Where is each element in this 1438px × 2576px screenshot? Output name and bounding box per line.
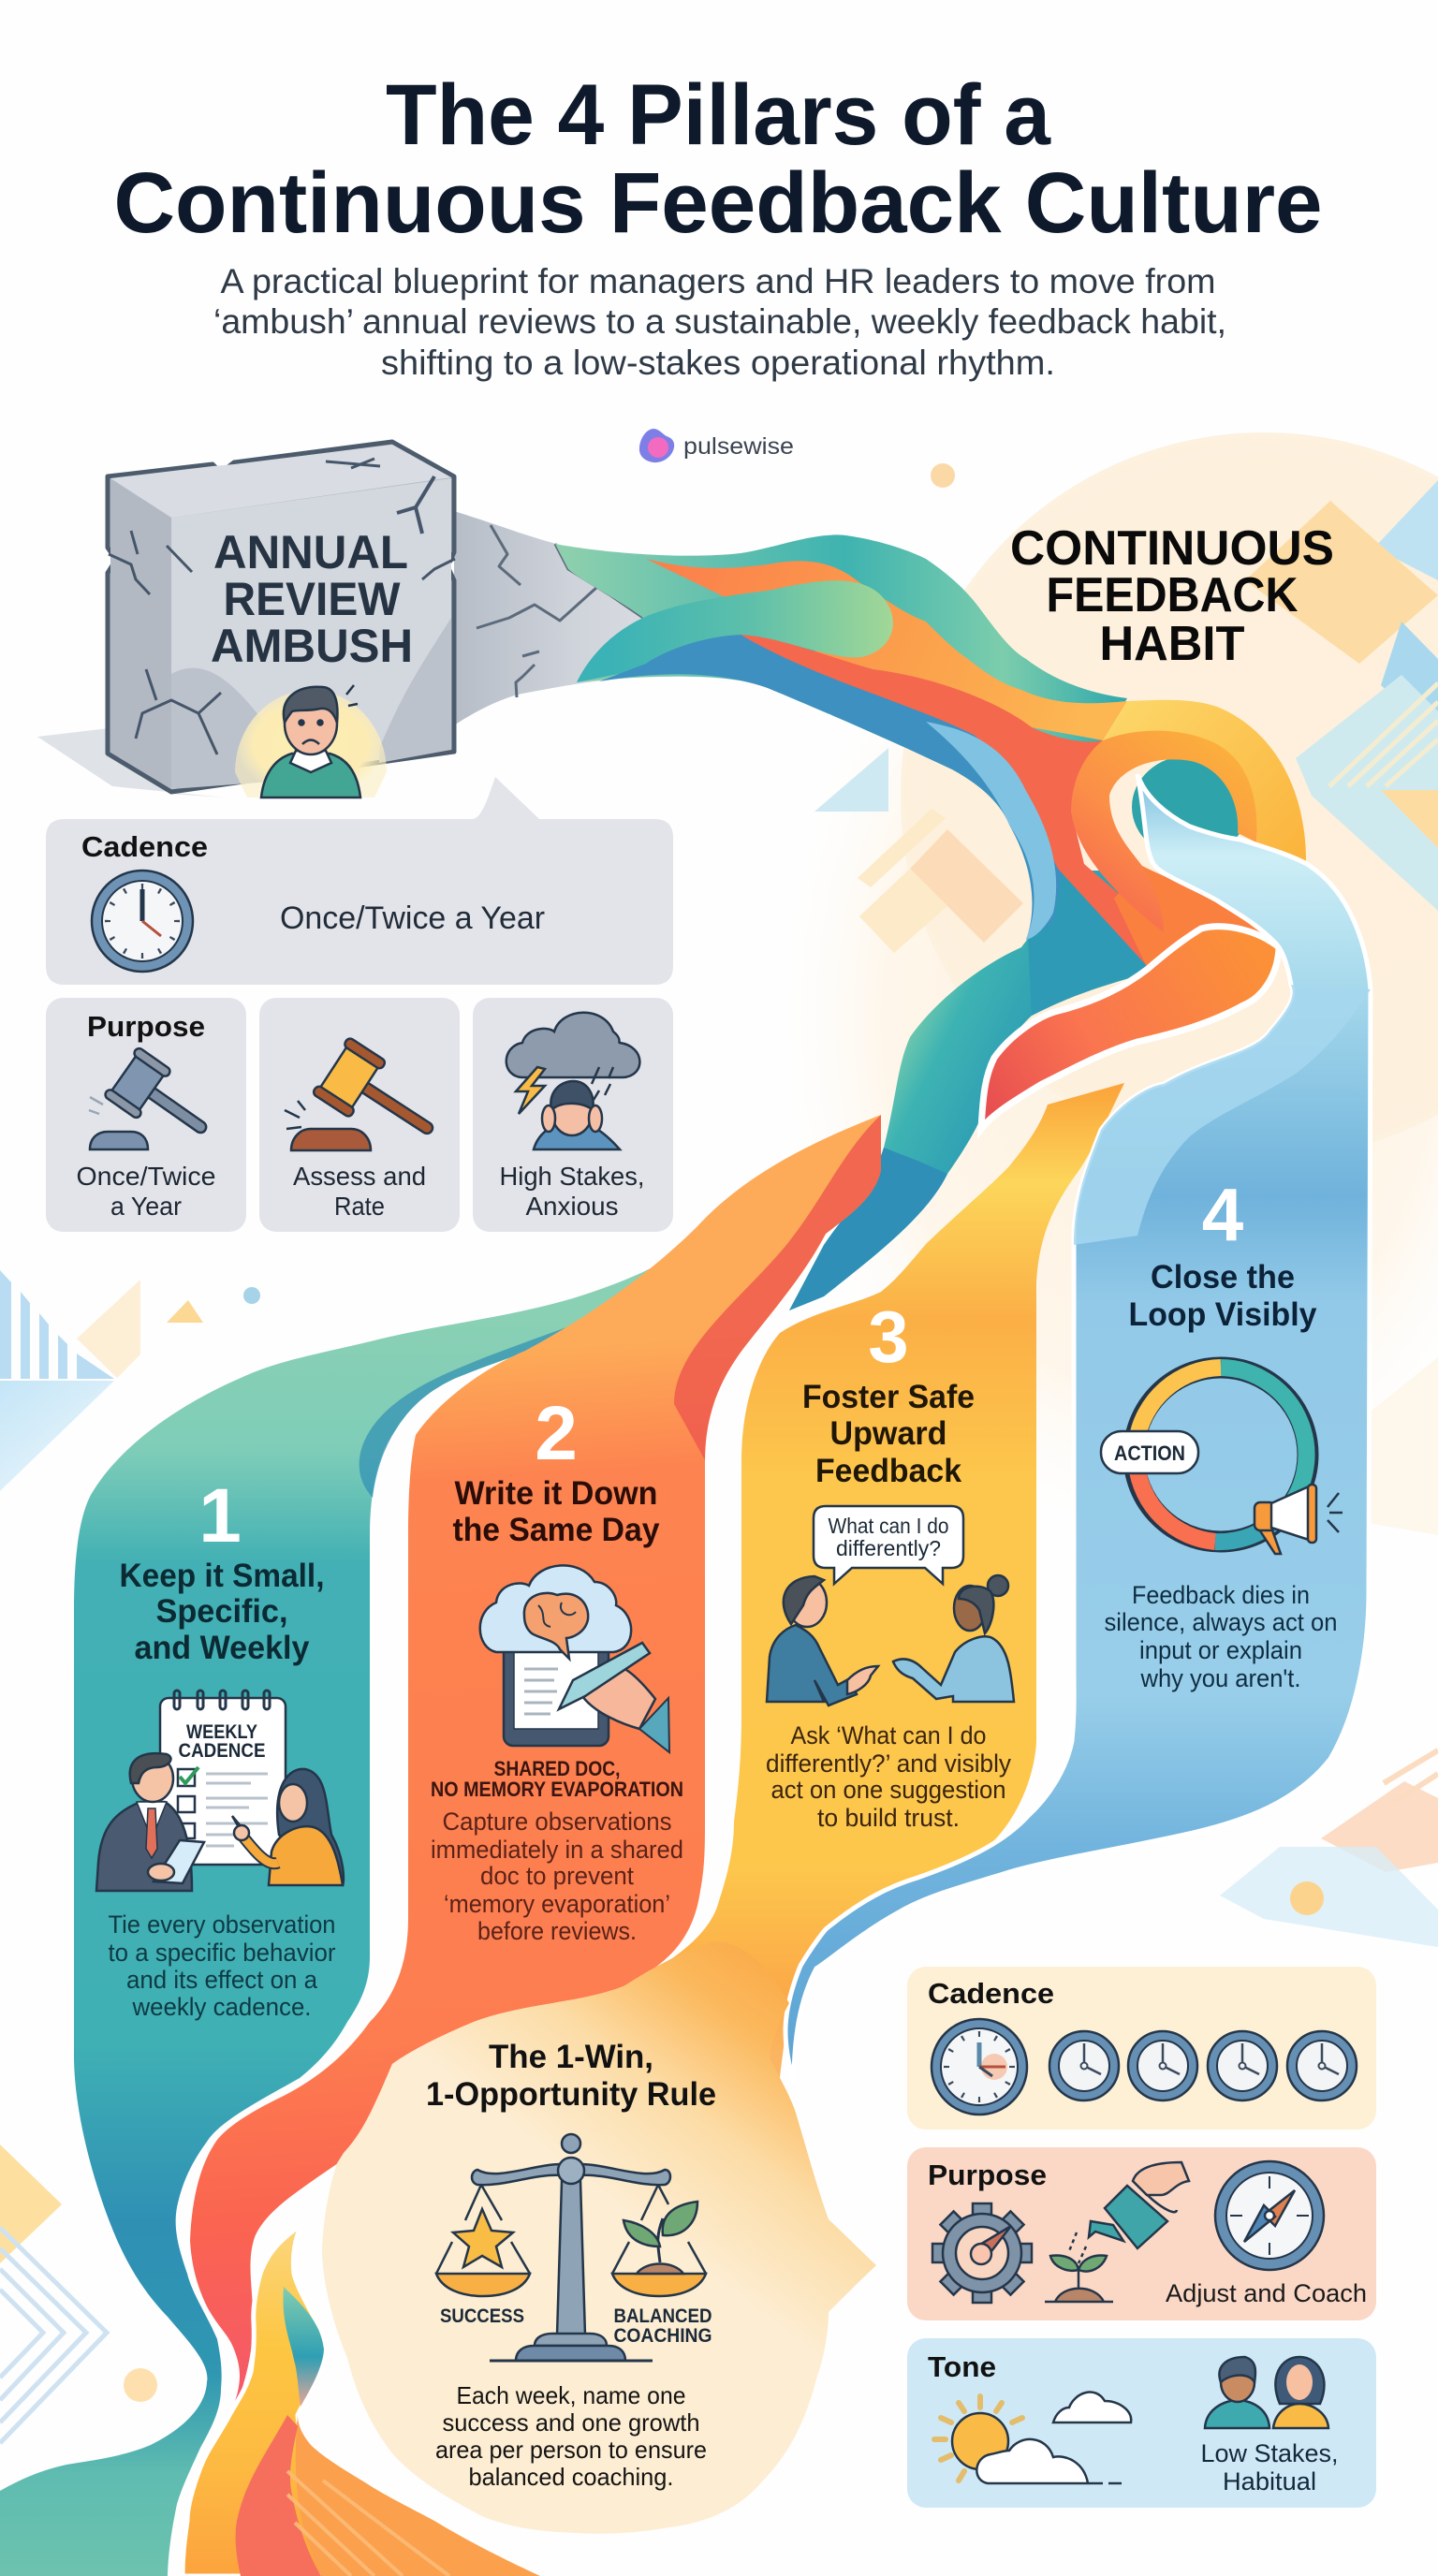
icon: brown gavel bbox=[285, 1037, 450, 1159]
pillar 1 description: Tie every observation bbox=[109, 1910, 335, 1939]
background decoration: upper right bbox=[768, 432, 1438, 1554]
flame: teal sliver bbox=[283, 2287, 324, 2407]
pillar 1 blue streak bbox=[360, 1315, 599, 1498]
icon: speech bubble bbox=[814, 1506, 963, 1584]
number 2: 2 bbox=[535, 1391, 578, 1476]
scale labels: BALANCED bbox=[614, 2305, 712, 2327]
stone label: AMBUSH bbox=[211, 620, 413, 672]
icon: cloud brain and tablet with hand bbox=[480, 1565, 669, 1752]
subtitle bbox=[213, 262, 1226, 382]
panel: left purpose once or twice a year bbox=[46, 998, 246, 1232]
logo: pulsewise: pulsewise bbox=[683, 433, 794, 460]
stone front face bbox=[171, 478, 451, 789]
ribbon: blue lower streak bbox=[789, 1148, 947, 1310]
pillar 3 heading: Feedback bbox=[815, 1453, 962, 1489]
blob description: success and one growth bbox=[442, 2408, 700, 2437]
panel: left purpose assess and rate: Rate bbox=[334, 1192, 385, 1221]
pillar 1: Keep it Small, Specific, and Weekly bbox=[0, 1226, 712, 2576]
action pill bbox=[1101, 1431, 1198, 1473]
pillar 1 heading: Specific, bbox=[155, 1593, 288, 1630]
stone block: Annual Review Ambush bbox=[37, 442, 455, 798]
pillar 4 heading: Close the bbox=[1151, 1259, 1295, 1295]
pillar 4 description: why you aren't. bbox=[1140, 1664, 1301, 1692]
blob description: balanced coaching. bbox=[468, 2463, 674, 2491]
subtitle: A practical blueprint for managers and HR leaders to move from bbox=[221, 262, 1215, 300]
pillar 3 description: Ask ‘What can I do bbox=[790, 1721, 987, 1749]
pillar 2 coral streak bbox=[674, 1115, 881, 1460]
pillar 4: Close the Loop Visibly bbox=[785, 774, 1371, 2083]
pillar 3 heading bbox=[802, 1379, 975, 1489]
pillar 4 description bbox=[1105, 1581, 1337, 1692]
flame: coral band bbox=[236, 2415, 321, 2576]
ribbon: coral band bbox=[741, 635, 1164, 967]
pillar 4 description: silence, always act on bbox=[1105, 1608, 1337, 1636]
background decoration: middle left bbox=[0, 1270, 260, 1491]
icon: feedback loop ring with action pill and megaphone bbox=[1101, 1368, 1343, 1554]
logo: pulsewise bbox=[639, 429, 794, 462]
action pill: ACTION bbox=[1114, 1442, 1185, 1465]
stone shadow bbox=[37, 728, 225, 798]
pillar 1 description: to a specific behavior bbox=[109, 1939, 336, 1967]
ring: orange inner bbox=[1071, 731, 1257, 932]
pillar 2 description: immediately in a shared bbox=[431, 1836, 683, 1864]
panel: left cadence callout bbox=[46, 777, 673, 985]
pillar 4 light streak bbox=[1074, 985, 1371, 1245]
pillar 3 heading: Foster Safe bbox=[802, 1379, 975, 1415]
ribbon: green teal band bbox=[577, 580, 893, 682]
bottom flame ribbon bbox=[183, 2224, 540, 2576]
ribbon: orange band bbox=[646, 559, 1127, 740]
right pan bbox=[612, 2185, 706, 2296]
pillar 1 heading: Keep it Small, bbox=[120, 1558, 324, 1594]
heading: Continuous Feedback Habit: HABIT bbox=[1099, 617, 1245, 671]
icon: weekly cadence notebook with two people bbox=[96, 1690, 344, 1891]
left pan bbox=[436, 2185, 530, 2296]
panel: left purpose assess and rate bbox=[259, 998, 460, 1232]
heading: Continuous Feedback Habit: CONTINUOUS bbox=[1010, 521, 1334, 576]
flame: pale stripes bbox=[287, 2471, 449, 2576]
pillar 1 description: weekly cadence. bbox=[132, 1993, 311, 2021]
icon: large weekly clock bbox=[932, 2019, 1027, 2115]
panel: right tone bbox=[907, 2338, 1376, 2508]
icon: two people talking bbox=[767, 1575, 1014, 1705]
pillar 3 description: to build trust. bbox=[817, 1804, 960, 1832]
cream blob bbox=[322, 1941, 876, 2534]
ribbon: light blue stripe bbox=[926, 722, 1056, 939]
panel: left purpose assess and rate: Assess and bbox=[293, 1162, 426, 1191]
stone label: REVIEW bbox=[223, 573, 401, 625]
icon: clock bbox=[92, 871, 193, 972]
swoosh: orange to red bbox=[981, 927, 1279, 1129]
panel: right cadence: Cadence bbox=[928, 1977, 1054, 2010]
icon: speech bubble: differently? bbox=[836, 1536, 941, 1560]
panel: right purpose: Adjust and Coach bbox=[1166, 2279, 1367, 2307]
panel: right tone: Tone bbox=[928, 2350, 996, 2383]
panel: right purpose: Purpose bbox=[928, 2159, 1047, 2191]
rock-to-ribbon transition bbox=[454, 511, 655, 725]
icon: weekly cadence notebook with two people: WEEKLY bbox=[186, 1721, 257, 1743]
blob heading: 1-Opportunity Rule bbox=[426, 2076, 716, 2113]
stone left face bbox=[110, 478, 171, 789]
pillar 2 ribbon bbox=[190, 1115, 881, 2419]
subtitle: ‘ambush’ annual reviews to a sustainable, weekly feedback habit, bbox=[213, 302, 1226, 341]
ribbon: teal descending bbox=[789, 871, 1161, 1310]
icon: watering can and seedling bbox=[1045, 2162, 1189, 2302]
pillar 2 description bbox=[431, 1808, 683, 1945]
pillar 2 description: before reviews. bbox=[477, 1917, 637, 1945]
subtitle: shifting to a low-stakes operational rhythm. bbox=[381, 344, 1055, 382]
ring: teal hole bbox=[1132, 755, 1248, 858]
blob description: Each week, name one bbox=[457, 2381, 685, 2409]
coral link bbox=[1114, 866, 1279, 969]
pillar 2 label: SHARED DOC, bbox=[494, 1757, 620, 1780]
blob heading: The 1-Win, bbox=[489, 2039, 653, 2075]
stone label: ANNUAL bbox=[213, 526, 408, 578]
title bbox=[114, 67, 1322, 251]
pillar 2 description: ‘memory evaporation’ bbox=[444, 1890, 670, 1918]
ribbon: blue base bbox=[599, 635, 1063, 940]
pillar 4 description: Feedback dies in bbox=[1132, 1581, 1310, 1609]
icon: compass bbox=[1215, 2161, 1324, 2270]
panel: left purpose once or twice a year: Purpose bbox=[87, 1010, 205, 1043]
pillar 1 ribbon bbox=[0, 1226, 712, 2576]
panel: right cadence bbox=[907, 1967, 1376, 2130]
pillar 3 heading: Upward bbox=[829, 1415, 947, 1452]
stone cracks bbox=[109, 459, 455, 754]
ribbon: top band silhouette bbox=[555, 534, 1127, 827]
icon: anxious person with glow bbox=[235, 685, 387, 798]
panel: left cadence callout: Cadence bbox=[81, 830, 208, 863]
background decoration: lower right bbox=[1220, 1750, 1438, 1947]
pillar 2 label: NO MEMORY EVAPORATION bbox=[431, 1778, 683, 1801]
heading: Continuous Feedback Habit: FEEDBACK bbox=[1047, 568, 1299, 622]
heading: Continuous Feedback Habit bbox=[1010, 521, 1334, 671]
icon: grey gavel bbox=[89, 1046, 222, 1155]
scale labels: SUCCESS bbox=[440, 2305, 524, 2327]
icon: two people bbox=[1205, 2357, 1328, 2428]
scale labels: COACHING bbox=[614, 2325, 712, 2347]
icon: sun and clouds bbox=[934, 2393, 1131, 2483]
stone lower shading bbox=[171, 618, 451, 789]
icon: storm cloud and stressed person bbox=[506, 1013, 639, 1149]
hand with pen bbox=[582, 1666, 655, 1729]
swoosh and ring in the knot bbox=[981, 700, 1306, 1129]
pillar 2 heading bbox=[453, 1475, 660, 1548]
pillar 3: Foster Safe Upward Feedback bbox=[624, 1083, 1124, 2134]
pillar 4 heading bbox=[1129, 1259, 1317, 1333]
pillar 3 description: differently?’ and visibly bbox=[766, 1749, 1011, 1778]
panel: left purpose once or twice a year: Once/Twice bbox=[77, 1162, 215, 1191]
ribbon: blue-teal knot centre bbox=[1028, 869, 1148, 1016]
pillar 1 heading: and Weekly bbox=[135, 1630, 310, 1666]
man in suit bbox=[96, 1753, 204, 1891]
pillar 2: Write it Down the Same Day bbox=[190, 1115, 881, 2419]
panel: left cadence callout: Once/Twice a Year bbox=[280, 900, 545, 936]
panel: right purpose bbox=[907, 2147, 1376, 2320]
pillar 3 ribbon bbox=[624, 1083, 1124, 2134]
flow ribbons tangle bbox=[555, 534, 1164, 1310]
pillar 2 heading: the Same Day bbox=[453, 1512, 660, 1548]
pillar 2 description: doc to prevent bbox=[480, 1862, 634, 1890]
panel: 1-Win 1-Opportunity Rule bbox=[322, 1941, 876, 2534]
panel: right tone: Low Stakes, bbox=[1200, 2439, 1339, 2467]
pillar 4 description: input or explain bbox=[1139, 1636, 1302, 1664]
pillar 3 description: act on one suggestion bbox=[771, 1776, 1005, 1804]
brain bbox=[524, 1593, 588, 1659]
panel: right tone: Habitual bbox=[1223, 2467, 1316, 2496]
panel: left purpose high stakes anxious bbox=[473, 998, 673, 1232]
blob heading bbox=[426, 2039, 716, 2113]
title: Continuous Feedback Culture bbox=[114, 155, 1322, 251]
number 3: 3 bbox=[868, 1295, 909, 1378]
pillar 1 description: and its effect on a bbox=[126, 1966, 318, 1994]
icon: weekly cadence notebook with two people: CADENCE bbox=[178, 1740, 266, 1762]
pillar 4 ribbon bbox=[785, 774, 1371, 2083]
pillar 2 label bbox=[431, 1757, 683, 1801]
ring: yellow outer bbox=[1103, 700, 1306, 861]
stone top face bbox=[110, 445, 451, 518]
pillar 3 description bbox=[766, 1721, 1011, 1832]
background decoration: lower left bbox=[0, 2144, 157, 2443]
number 4: 4 bbox=[1202, 1173, 1244, 1256]
title: The 4 Pillars of a bbox=[386, 67, 1051, 163]
icon: balance scale with star and plant bbox=[436, 2134, 706, 2361]
flame: orange lower bbox=[296, 2415, 540, 2576]
icon: speech bubble: What can I do bbox=[828, 1514, 949, 1538]
panel: left purpose high stakes anxious: High Stakes, bbox=[500, 1162, 644, 1191]
panel: left purpose once or twice a year: a Year bbox=[110, 1192, 182, 1221]
blob description: area per person to ensure bbox=[435, 2436, 707, 2464]
scale labels bbox=[440, 2305, 712, 2347]
pillar 2 description: Capture observations bbox=[442, 1808, 672, 1836]
pillar 2 heading: Write it Down bbox=[455, 1475, 657, 1512]
stone label bbox=[211, 526, 413, 672]
pillar 1 heading bbox=[120, 1558, 324, 1666]
megaphone bbox=[1255, 1485, 1343, 1554]
stone body bbox=[108, 442, 454, 792]
panel: left purpose high stakes anxious: Anxious bbox=[526, 1192, 618, 1221]
woman in orange bbox=[232, 1769, 344, 1885]
number 1: 1 bbox=[198, 1473, 242, 1559]
pillar 4 heading: Loop Visibly bbox=[1129, 1296, 1317, 1333]
icon: small weekly clocks bbox=[1049, 2031, 1357, 2100]
icon: gear with gauge bbox=[932, 2203, 1032, 2303]
blob description bbox=[435, 2381, 707, 2491]
pillar 1 description bbox=[109, 1910, 336, 2021]
